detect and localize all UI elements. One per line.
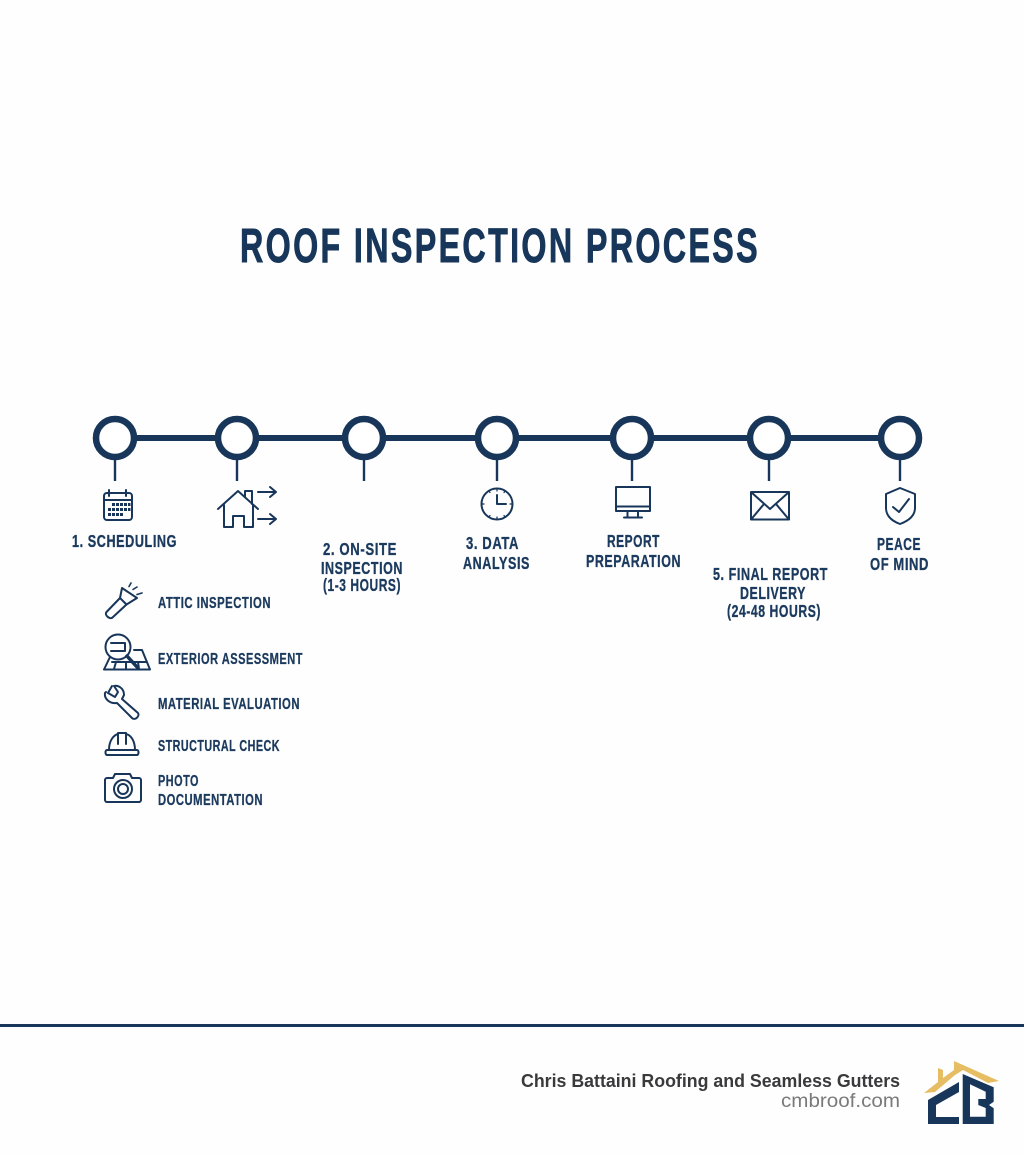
label: report preparation: REPORT [607,531,660,551]
icon: flashlight [106,583,142,618]
label: 2. on-site inspection [321,539,403,595]
timeline node: data analysis [478,419,516,481]
checklist item: photo documentation: PHOTO [158,773,199,790]
checklist item: photo documentation [158,773,263,809]
checklist item: exterior assessment: EXTERIOR ASSESSMENT [158,651,303,668]
icon: calendar [104,490,132,520]
icon: clock [482,488,512,520]
timeline node: house [218,419,256,481]
label: 1. scheduling: 1. SCHEDULING [72,531,177,551]
label: report preparation [586,531,681,571]
label: 2. on-site inspection: (1-3 HOURS) [323,575,401,595]
label: 5. final report delivery: DELIVERY [740,583,806,603]
label: 2. on-site inspection: 2. ON-SITE [323,539,397,559]
label: peace of mind [870,534,929,574]
label: 5. final report delivery: (24-48 HOURS) [727,601,821,621]
timeline node: final report delivery [750,419,788,481]
icon: hard hat [106,733,138,755]
label: 5. final report delivery: 5. FINAL REPORT [713,564,828,584]
icon: house with arrows [218,487,276,527]
label: 3. data analysis [463,533,530,573]
label: peace of mind: OF MIND [870,554,929,574]
icon: monitor [616,487,650,518]
label: 3. data analysis: ANALYSIS [463,553,530,573]
on-site checklist [104,583,303,809]
timeline node: scheduling [96,419,134,481]
icon: magnifier over roof tiles [104,634,150,670]
label: 3. data analysis: 3. DATA [466,533,519,553]
footer divider [0,1024,1024,1027]
timeline node: peace of mind [881,419,919,481]
timeline node: report preparation [613,419,651,481]
timeline connector line [115,435,900,441]
checklist item: structural check: STRUCTURAL CHECK [158,738,280,755]
checklist item: photo documentation: DOCUMENTATION [158,792,263,809]
timeline [96,419,919,481]
checklist item: material evaluation: MATERIAL EVALUATION [158,696,300,713]
icon: camera [105,774,141,802]
checklist item: attic inspection: ATTIC INSPECTION [158,595,271,612]
footer [0,1024,1024,1124]
icon: wrench [105,686,138,719]
icon: shield with check [886,488,915,524]
label: 2. on-site inspection: INSPECTION [321,558,403,578]
label: 5. final report delivery [713,564,828,621]
title: ROOF INSPECTION PROCESS [240,220,760,273]
icon: envelope [751,492,789,520]
label: peace of mind: PEACE [877,534,921,554]
footer company name: Chris Battaini Roofing and Seamless Gutters [521,1071,900,1091]
logo: CB house [924,1061,999,1124]
timeline node: on-site inspection [345,419,383,481]
label: report preparation: PREPARATION [586,551,681,571]
footer website: cmbroof.com [781,1091,900,1112]
